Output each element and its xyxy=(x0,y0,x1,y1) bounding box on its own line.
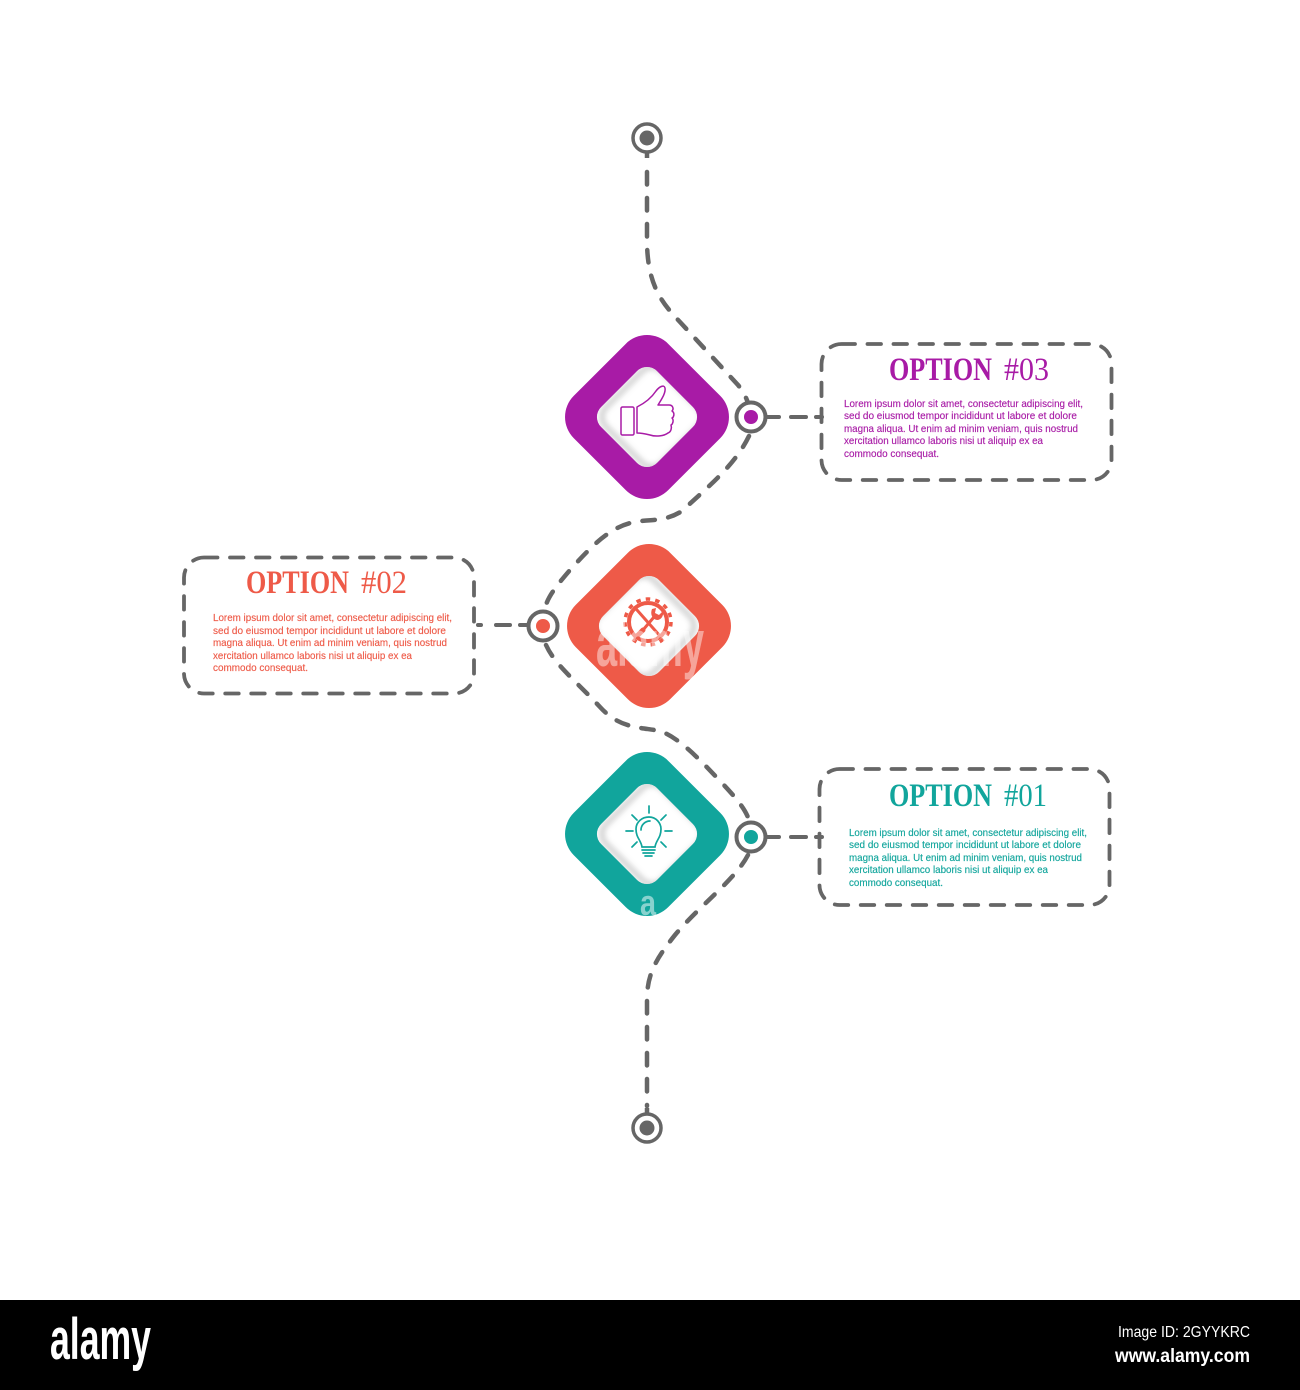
start node xyxy=(633,124,661,158)
icon: gear with tools xyxy=(625,599,671,645)
heading: option 03: OPTION xyxy=(889,352,992,388)
footer logo: alamy xyxy=(50,1307,151,1372)
connector: option 01 xyxy=(767,835,822,839)
text block: option 02: xercitation ullamco laboris nisi ut aliquip ex ea xyxy=(213,650,412,662)
text block: option 01 xyxy=(849,827,1087,889)
text block: option 03: xercitation ullamco laboris nisi ut aliquip ex ea xyxy=(844,435,1043,447)
connector: option 03 xyxy=(767,415,822,419)
text block: option 01: Lorem ipsum dolor sit amet, consectetur adipiscing elit, xyxy=(849,827,1087,839)
text block: option 02 xyxy=(213,612,452,674)
heading: option 02: OPTION xyxy=(246,565,349,601)
footer bar xyxy=(0,1300,1300,1390)
node: option 02 xyxy=(528,612,558,640)
panel: option 03 xyxy=(822,344,1112,480)
watermark on diamond 01: a xyxy=(640,882,657,923)
text block: option 01: sed do eiusmod tempor incididunt ut labore et dolore xyxy=(849,839,1081,851)
diamond: option 01 xyxy=(565,752,729,916)
panel: option 02 xyxy=(184,558,474,694)
watermark on diamond 02: alamy xyxy=(596,606,704,680)
heading: option 01: OPTION xyxy=(889,778,992,814)
text block: option 01: xercitation ullamco laboris nisi ut aliquip ex ea xyxy=(849,864,1048,876)
node: option 01 xyxy=(736,822,766,852)
diamond: option 02 xyxy=(567,544,731,708)
node: option 03 xyxy=(736,402,766,432)
icon: thumbs up xyxy=(621,386,674,436)
text block: option 01: commodo consequat. xyxy=(849,877,943,889)
text block: option 03: sed do eiusmod tempor incididunt ut labore et dolore xyxy=(844,410,1077,422)
text block: option 02: sed do eiusmod tempor incididunt ut labore et dolore xyxy=(213,625,446,637)
heading: option 02: #02 xyxy=(361,565,407,601)
website: www.alamy.com xyxy=(1114,1346,1250,1367)
text block: option 02: magna aliqua. Ut enim ad minim veniam, quis nostrud xyxy=(213,637,447,649)
text block: option 02: commodo consequat. xyxy=(213,662,308,674)
icon: light bulb xyxy=(626,806,672,856)
text block: option 03: magna aliqua. Ut enim ad minim veniam, quis nostrud xyxy=(844,423,1078,435)
heading: option 01: #01 xyxy=(1004,778,1047,814)
text block: option 03: commodo consequat. xyxy=(844,448,939,460)
text block: option 01: magna aliqua. Ut enim ad minim veniam, quis nostrud xyxy=(849,852,1082,864)
connector: option 02 xyxy=(478,623,528,627)
text block: option 02: Lorem ipsum dolor sit amet, consectetur adipiscing elit, xyxy=(213,612,452,624)
text block: option 03: Lorem ipsum dolor sit amet, consectetur adipiscing elit, xyxy=(844,398,1083,410)
heading: option 03: #03 xyxy=(1004,352,1049,388)
image id: Image ID: 2GYYKRC xyxy=(1118,1324,1250,1341)
diamond: option 03 xyxy=(565,335,729,499)
panel: option 01 xyxy=(820,769,1110,905)
end node xyxy=(633,1108,661,1142)
timeline dashed path xyxy=(545,172,749,1106)
text block: option 03 xyxy=(844,398,1083,460)
